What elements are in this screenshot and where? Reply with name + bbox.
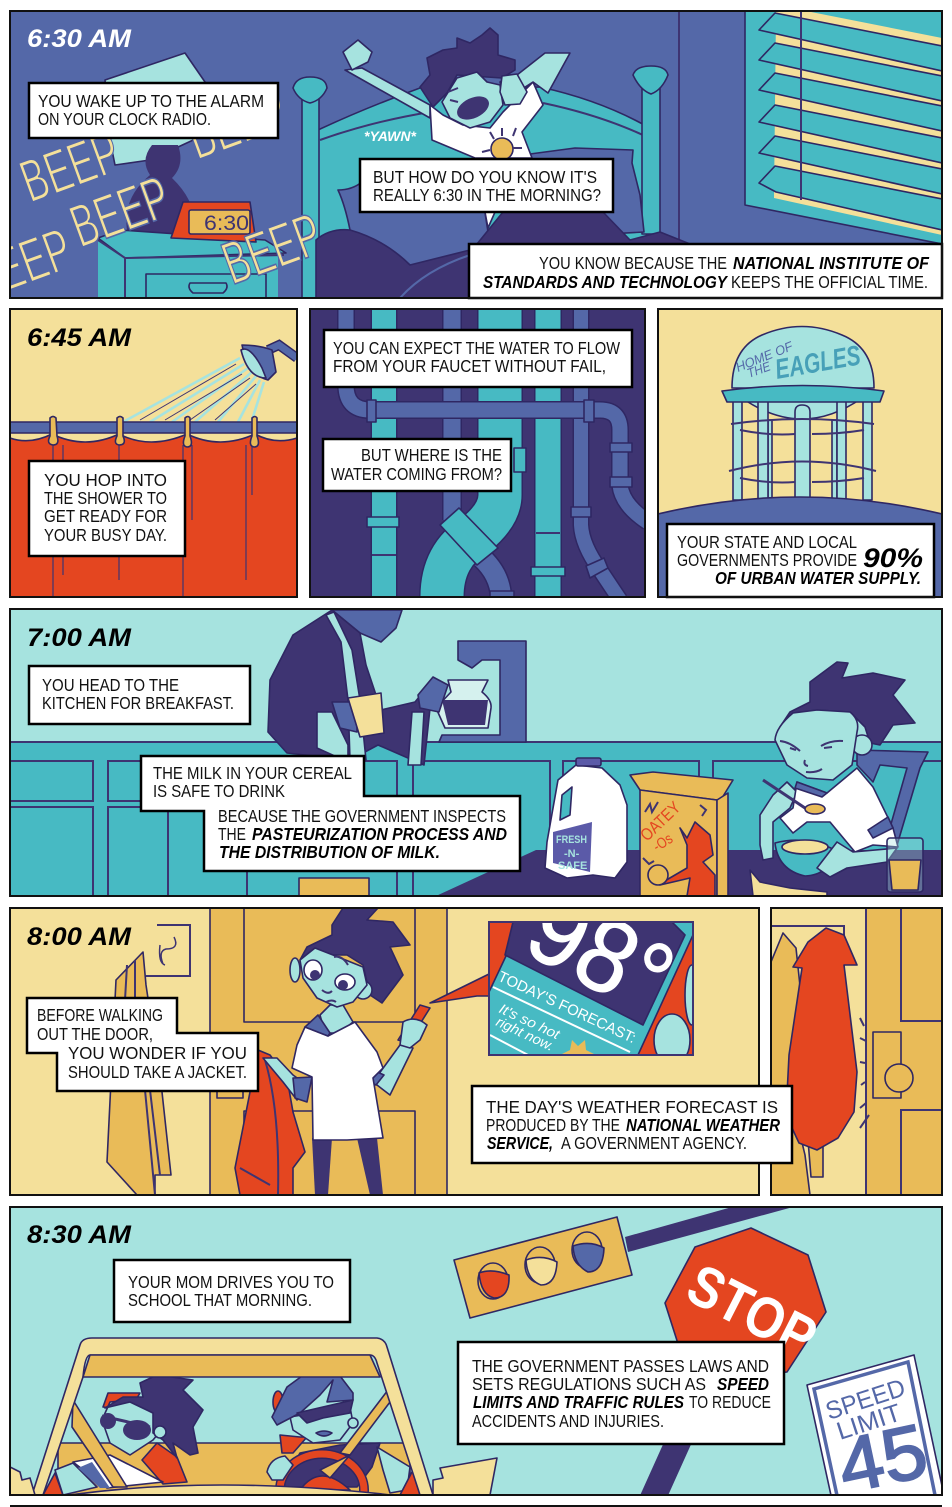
traffic light — [454, 1207, 793, 1318]
next panel top edge — [10, 1505, 942, 1507]
shirt sun — [491, 138, 513, 160]
caption: where is the water from — [323, 439, 511, 491]
passenger in sunglasses — [43, 1375, 203, 1495]
character yawning — [343, 28, 570, 228]
yellow coat — [771, 933, 810, 1195]
caption: mom drives — [114, 1260, 350, 1322]
coffee maker — [436, 641, 526, 742]
water tower: EAGLES — [773, 339, 863, 385]
juice glass — [887, 838, 923, 892]
caption: milk is safe: BECAUSE THE GOVERNMENT INSPECTS — [218, 806, 506, 826]
panel: front door with coats — [771, 908, 942, 1195]
legs — [312, 1138, 332, 1195]
inset: phone forecast: TODAY'S FORECAST: — [495, 968, 638, 1047]
stop sign: STOP — [677, 1252, 827, 1371]
hanging yellow coat — [107, 952, 171, 1195]
face — [442, 72, 503, 128]
caption: water flow: FROM YOUR FAUCET WITHOUT FAIL, — [333, 356, 606, 376]
caption: 90 percent of water: OF URBAN WATER SUPPLY. — [715, 568, 921, 588]
caption: laws and regulations: ACCIDENTS AND INJURIES. — [472, 1411, 664, 1431]
water tower: THE — [745, 358, 773, 381]
cereal box: OATEY — [637, 798, 684, 845]
timestamp 6:30 AM: 6:30 AM — [27, 25, 132, 53]
caption: how do you know — [360, 159, 613, 212]
speed limit sign: 45 — [831, 1408, 935, 1507]
inset: phone forecast: It's so hot — [497, 1000, 563, 1043]
face — [300, 948, 367, 1007]
chair — [857, 750, 928, 852]
caption: how do you know: BUT HOW DO YOU KNOW IT'S — [373, 167, 597, 187]
caption: weather service: SERVICE, — [487, 1133, 553, 1153]
caption: where is the water from: WATER COMING FROM? — [331, 464, 502, 484]
shirt — [430, 82, 543, 158]
caption: alarm: ON YOUR CLOCK RADIO. — [38, 109, 211, 129]
alarm clock — [171, 202, 256, 242]
hair — [780, 662, 915, 745]
caption: take a jacket: OUT THE DOOR, — [37, 1024, 153, 1044]
caption: milk is safe — [141, 756, 520, 871]
left arm — [760, 782, 797, 860]
caption: take a jacket — [27, 998, 258, 1091]
lamp — [105, 53, 205, 235]
water tower — [722, 326, 884, 500]
banana — [750, 870, 827, 896]
caption: weather service: A GOVERNMENT AGENCY. — [561, 1133, 747, 1153]
panel: 6:45 AM shower — [10, 309, 297, 597]
caption: laws and regulations: LIMITS AND TRAFFIC RULES — [473, 1392, 684, 1412]
far arm — [500, 53, 570, 100]
milk jug — [545, 758, 627, 878]
bedding and pillows — [316, 148, 690, 298]
nightstand — [98, 230, 286, 304]
ears — [290, 958, 300, 982]
alarm clock: 6:30 — [204, 212, 249, 235]
caption: weather service — [472, 1086, 792, 1163]
caption: alarm — [29, 83, 278, 138]
caption: take a jacket: YOU WONDER IF YOU — [68, 1043, 247, 1063]
caption: mom drives: YOUR MOM DRIVES YOU TO — [128, 1272, 334, 1292]
girl checking phone — [263, 908, 430, 1195]
caption: 90 percent of water — [667, 524, 934, 597]
caption: weather service: NATIONAL WEATHER — [626, 1115, 780, 1135]
beep sound effects — [11, 100, 316, 289]
face — [775, 710, 858, 780]
caption: national institute — [469, 244, 942, 298]
arms — [373, 1045, 413, 1095]
beep sound effects: BEEP — [179, 75, 295, 172]
caption: hop into the shower: YOUR BUSY DAY. — [44, 525, 167, 545]
phone callout pointer — [430, 974, 489, 1003]
caption: laws and regulations: SPEED — [717, 1374, 769, 1394]
cereal box: -Os — [650, 830, 676, 855]
window with blinds — [745, 11, 942, 244]
caption: 90 percent of water: YOUR STATE AND LOCAL — [677, 532, 857, 552]
cereal box — [630, 772, 733, 896]
hair — [420, 28, 515, 107]
timestamp 7:00 AM: 7:00 AM — [27, 624, 132, 652]
inset: phone forecast: 98° — [509, 868, 692, 1038]
car body — [10, 1338, 497, 1496]
caption: take a jacket: SHOULD TAKE A JACKET. — [68, 1062, 247, 1082]
yawn text: *YAWN* — [364, 128, 417, 144]
caption: national institute: YOU KNOW BECAUSE THE — [539, 253, 727, 273]
caption: national institute: NATIONAL INSTITUTE OF — [733, 253, 930, 273]
driver in sunglasses — [267, 1368, 420, 1507]
girl eating cereal — [750, 662, 928, 896]
caption: kitchen — [29, 666, 250, 724]
panel: 7:00 AM kitchen — [10, 609, 952, 911]
shirt — [780, 768, 898, 852]
caption: hop into the shower — [29, 461, 185, 556]
caption: weather service: PRODUCED BY THE — [486, 1115, 620, 1135]
caption: take a jacket: BEFORE WALKING — [37, 1005, 163, 1025]
hill — [658, 497, 942, 597]
caption: laws and regulations: SETS REGULATIONS SUCH AS — [472, 1374, 706, 1394]
caption: national institute: STANDARDS AND TECHNOLOGY — [483, 272, 728, 292]
hair — [300, 908, 410, 1003]
wall hook — [146, 925, 190, 976]
panel: water tower — [658, 309, 942, 597]
pipes — [346, 309, 648, 600]
caption: 90 percent of water: GOVERNMENTS PROVIDE — [677, 550, 857, 570]
parent in robe — [268, 610, 448, 898]
caption: hop into the shower: THE SHOWER TO — [44, 488, 167, 508]
speed limit sign — [807, 1355, 945, 1507]
stop sign pole — [638, 1440, 693, 1500]
red jacket on hook — [786, 928, 857, 1150]
caption: kitchen: KITCHEN FOR BREAKFAST. — [42, 693, 234, 713]
right arm — [817, 842, 897, 877]
raised arm and fist — [345, 68, 430, 118]
beep sound effects: BEEP — [214, 200, 330, 297]
table — [436, 850, 942, 896]
caption: 90 percent of water: 90% — [863, 543, 923, 573]
caption: laws and regulations — [458, 1342, 784, 1444]
caption: water flow: YOU CAN EXPECT THE WATER TO FLOW — [333, 338, 620, 358]
beep sound effects: BEEP — [62, 163, 178, 260]
inset: phone forecast: right now. — [494, 1013, 557, 1054]
caption: milk is safe: THE MILK IN YOUR CEREAL — [153, 763, 352, 783]
shirt — [292, 1022, 383, 1140]
caption: kitchen: YOU HEAD TO THE — [42, 675, 179, 695]
milk jug: FRESH — [556, 834, 587, 846]
pipe flanges — [367, 400, 632, 599]
timestamp 8:30 AM: 8:30 AM — [27, 1221, 132, 1249]
caption: milk is safe: THE — [218, 824, 246, 844]
beep sound effects: BEEP — [12, 118, 128, 215]
bed headboard and posts — [293, 66, 668, 298]
phone and hand — [398, 1005, 430, 1043]
caption: where is the water from: BUT WHERE IS THE — [361, 445, 502, 465]
shower head — [241, 345, 297, 380]
red jacket in hand — [235, 1050, 305, 1195]
speed limit sign: SPEED — [822, 1374, 909, 1426]
door handle — [873, 1032, 913, 1098]
spoon — [763, 780, 805, 808]
car interior seat — [58, 1443, 410, 1498]
neck — [320, 1005, 353, 1033]
caption: hop into the shower: YOU HOP INTO — [44, 470, 167, 490]
shower curtain — [10, 416, 297, 597]
milk jug: SAFE — [558, 860, 587, 872]
caption: water flow — [324, 330, 632, 387]
speed limit sign: LIMIT — [833, 1399, 905, 1446]
panel: 8:30 AM driving — [10, 1207, 945, 1507]
water tower: HOME OF — [734, 338, 796, 375]
timestamp 6:45 AM: 6:45 AM — [27, 324, 132, 352]
caption: laws and regulations: TO REDUCE — [689, 1392, 771, 1412]
bowl — [775, 840, 835, 876]
caption: weather service: THE DAY'S WEATHER FORECAST IS — [486, 1097, 778, 1117]
ear — [852, 735, 872, 755]
caption: alarm: YOU WAKE UP TO THE ALARM — [38, 91, 264, 111]
caption: how do you know: REALLY 6:30 IN THE MORNING? — [373, 185, 601, 205]
caption: milk is safe: PASTEURIZATION PROCESS AND — [252, 824, 507, 844]
panel: water pipes — [310, 309, 648, 600]
panel: 8:00 AM hallway — [10, 868, 759, 1211]
panel: 6:30 AM bedroom — [0, 11, 942, 312]
door — [210, 900, 447, 1211]
milk jug: -N- — [564, 848, 580, 860]
caption: laws and regulations: THE GOVERNMENT PASSES LAWS AND — [472, 1356, 769, 1376]
caption: hop into the shower: GET READY FOR — [44, 506, 167, 526]
hand at ear — [500, 74, 527, 105]
caption: milk is safe: THE DISTRIBUTION OF MILK. — [219, 842, 440, 862]
water spray — [123, 358, 264, 422]
caption: milk is safe: IS SAFE TO DRINK — [153, 781, 285, 801]
caption: mom drives: SCHOOL THAT MORNING. — [128, 1290, 312, 1310]
timestamp 8:00 AM: 8:00 AM — [27, 923, 132, 951]
